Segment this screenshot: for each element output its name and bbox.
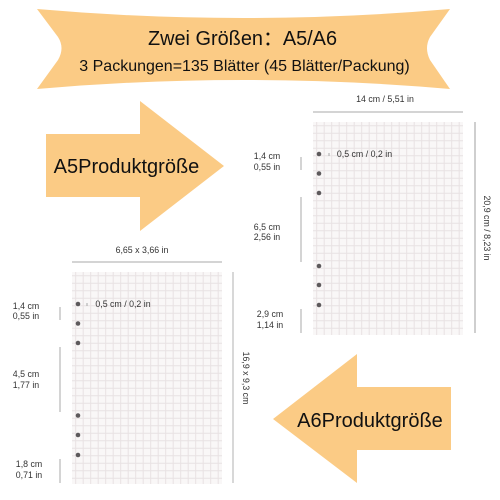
arrow: A5 size: A5Produktgröße — [54, 156, 199, 178]
arrow: A6 size: A6Produktgröße — [297, 410, 443, 432]
subtitle: 3 Packungen=135 Blätter (45 Blätter/Packung) — [79, 58, 410, 75]
A5 punch holes — [317, 152, 321, 307]
A5 grid page — [313, 122, 463, 335]
A6 hole spacing dimensions: 0,55 in — [13, 311, 39, 321]
A6 hole spacing dimensions: 1,77 in — [13, 380, 39, 390]
A6 punch holes — [76, 302, 80, 457]
A5 hole spacing dimensions: 2,9 cm — [257, 309, 283, 319]
A5 hole size label: 0,5 cm / 0,2 in — [337, 149, 392, 159]
A5 hole spacing dimensions: 0,55 in — [254, 162, 280, 172]
A5 height dimension: 20,9 cm / 8,23 in — [482, 195, 492, 261]
arrow: A5 size — [46, 101, 224, 231]
A6 hole spacing dimensions: 1,4 cm — [13, 301, 39, 311]
A6 hole size label: 0,5 cm / 0,2 in — [95, 299, 151, 309]
A6 hole spacing dimensions: 0,71 in — [16, 470, 42, 480]
A6 sheet diagram — [13, 245, 251, 484]
A5 hole spacing dimensions: 1,14 in — [257, 320, 283, 330]
A5 hole spacing dimensions: 2,56 in — [254, 232, 280, 242]
A6 height dimension: 16,9 x 9,3 cm — [241, 352, 251, 404]
A5 width dimension: 14 cm / 5,51 in — [356, 94, 414, 104]
A6 grid page — [72, 272, 222, 484]
A6 hole spacing dimensions — [13, 301, 60, 483]
arrow: A6 size — [273, 354, 451, 483]
title: Zwei Größen：A5/A6 — [148, 28, 337, 50]
A6 width dimension: 6,65 x 3,66 in — [116, 245, 169, 255]
banner ribbon — [37, 9, 450, 89]
A5 hole spacing dimensions: 1,4 cm — [254, 151, 280, 161]
A5 hole spacing dimensions — [254, 151, 301, 333]
A6 hole spacing dimensions: 4,5 cm — [13, 369, 39, 379]
A5 hole spacing dimensions: 6,5 cm — [254, 222, 280, 232]
A6 hole spacing dimensions: 1,8 cm — [16, 459, 42, 469]
A5 sheet diagram — [254, 94, 492, 335]
